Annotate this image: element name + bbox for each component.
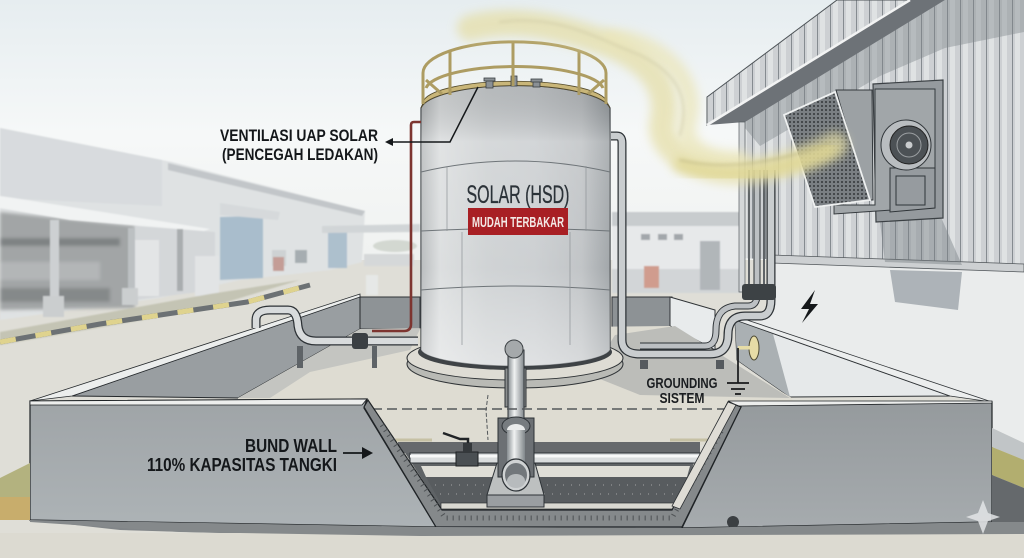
arrow: bund wall: [343, 447, 373, 459]
bund wall left front: [30, 399, 436, 527]
deck ring: [421, 81, 610, 108]
right building: roof and upper corrugated wall: [707, 0, 1024, 443]
tank name: SOLAR (HSD): [466, 181, 570, 209]
horizontal drain pipe and valve: [395, 433, 710, 466]
left process pipe: [256, 310, 418, 368]
arrow: ventilasi leader: [385, 87, 478, 146]
ground concrete: [0, 260, 1024, 558]
leader dashed line: [486, 395, 488, 440]
icon: mesh intake panel: [784, 92, 870, 207]
icon: sparkle watermark: [966, 500, 1000, 534]
sky background: [0, 0, 1024, 300]
label: ventilasi: VENTILASI UAP SOLAR: [220, 126, 378, 145]
tank shell: [421, 86, 610, 366]
centre outlet pipe on pedestal: [487, 340, 544, 507]
label: bund wall: 110% KAPASITAS TANGKI: [147, 455, 337, 475]
red vent pipe: [372, 122, 421, 331]
bund wall right front: [682, 401, 992, 528]
kerb stripes: [0, 285, 310, 342]
label: bund wall: BUND WALL: [245, 436, 337, 456]
background: small building behind tank: [612, 212, 742, 293]
label: grounding sistem: GROUNDING: [646, 375, 718, 392]
bund floor: [238, 326, 800, 445]
fan scroll housing: [890, 168, 935, 212]
ground shadow under front walls: [30, 520, 1024, 536]
trench floor view: [398, 442, 700, 510]
label: grounding sistem: SISTEM: [660, 390, 704, 407]
concrete tank plinth: [407, 334, 623, 388]
front ground strip: [0, 428, 1024, 558]
label: ventilasi: (PENCEGAH LEDAKAN): [222, 145, 378, 164]
label: bund wall: [147, 436, 337, 475]
warning plate: [468, 208, 568, 235]
storage tank SOLAR (HSD): [421, 42, 610, 366]
icon: lightning bolt: [801, 290, 818, 323]
bund back and side inner walls: [30, 294, 992, 402]
warning plate: MUDAH TERBAKAR: [472, 214, 564, 231]
safety railing: [423, 42, 606, 104]
vent caps: [484, 76, 542, 88]
ventilation fan unit on wall: [784, 80, 943, 222]
background: warehouse on left: [0, 128, 420, 345]
vapour plume: [470, 21, 835, 173]
dashed level line: [372, 408, 725, 410]
label: ventilasi: [220, 126, 378, 164]
icon: grounding terminal and symbol: [727, 336, 759, 394]
right process pipe: [611, 136, 776, 369]
label: grounding sistem: [646, 375, 718, 407]
icon: blower fan: [881, 120, 931, 170]
trench cross-section concrete: [364, 400, 741, 528]
